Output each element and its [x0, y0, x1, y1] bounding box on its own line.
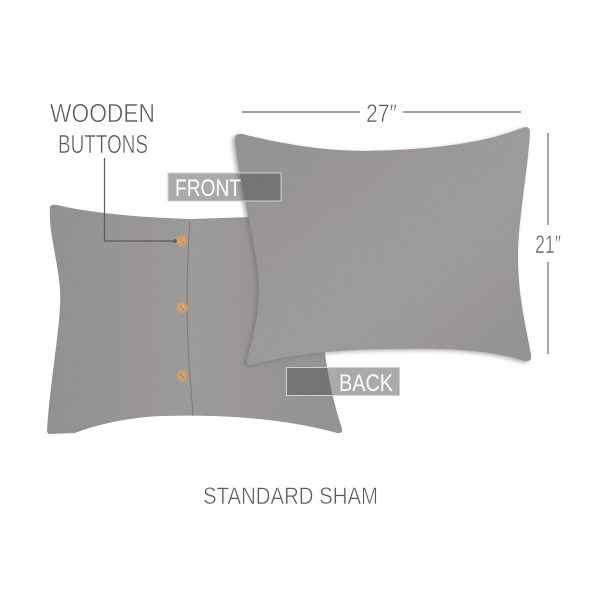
wooden button 3	[176, 370, 188, 382]
pillow: back view with buttons	[47, 205, 342, 434]
heading: wooden buttons callout: BUTTONS	[58, 129, 148, 159]
pillow: front view	[232, 127, 531, 367]
dimension: height 21 inches: 21″	[535, 231, 561, 259]
dimension: width 27 inches: 27″	[366, 100, 397, 128]
label: back	[286, 368, 400, 397]
wooden button 2	[176, 302, 188, 314]
label: back: BACK	[339, 370, 393, 397]
wooden button 1	[176, 235, 188, 247]
button placket seam	[187, 221, 193, 416]
heading: wooden buttons callout: WOODEN	[50, 98, 155, 128]
caption: standard sham: STANDARD SHAM	[203, 483, 378, 510]
label: front	[168, 173, 281, 202]
label: front: FRONT	[175, 175, 241, 202]
heading: wooden buttons callout	[50, 98, 155, 159]
leader line to button	[104, 158, 177, 243]
